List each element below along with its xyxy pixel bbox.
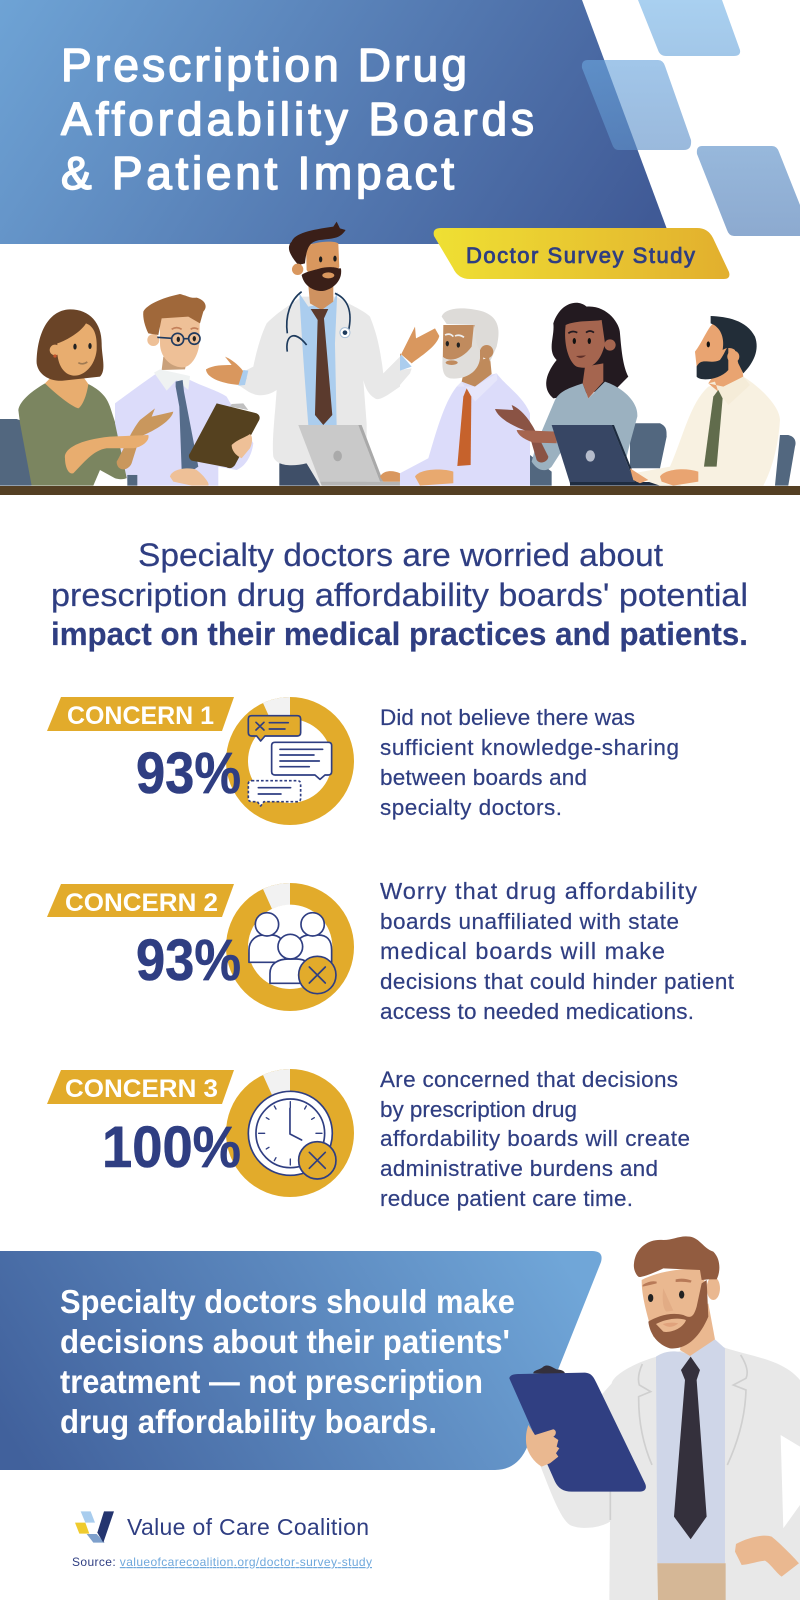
- description: reduce patient care time.: [380, 1186, 633, 1211]
- callout text: treatment — not prescription: [60, 1363, 483, 1400]
- doctor's raised hand: [400, 327, 439, 385]
- description: Worry that drug affordability: [380, 878, 697, 904]
- title: Prescription Drug: [61, 39, 467, 91]
- donut chart 93% with chat icons: [237, 697, 343, 814]
- description: administrative burdens and: [380, 1156, 658, 1181]
- title: & Patient Impact: [61, 147, 454, 199]
- description: access to needed medications.: [380, 999, 694, 1024]
- title: [61, 39, 534, 199]
- stat 93%: 93%: [136, 928, 241, 993]
- description: Are concerned that decisions: [380, 1067, 678, 1092]
- concern 2: [47, 878, 735, 1024]
- donut chart 93% with people icon: [237, 883, 343, 1000]
- woman in green: [18, 309, 132, 486]
- description: [380, 705, 679, 820]
- concern 1: [47, 697, 679, 820]
- left half of the team: [0, 222, 400, 486]
- chairs: [530, 423, 796, 486]
- badge: Doctor Survey Study: Doctor Survey Study: [466, 243, 695, 268]
- intro text: prescription drug affordability boards' potential: [51, 577, 748, 613]
- man with beard: [630, 316, 780, 486]
- description: affordability boards will create: [380, 1126, 690, 1151]
- callout text: drug affordability boards.: [60, 1403, 437, 1440]
- older man: [400, 308, 530, 486]
- woman with dark hair: [495, 303, 637, 470]
- chair: [0, 419, 32, 486]
- description: between boards and: [380, 765, 587, 790]
- callout text: [60, 1283, 515, 1440]
- description: medical boards will make: [380, 938, 665, 964]
- logo mark: [75, 1511, 114, 1543]
- dark laptop: [552, 425, 681, 486]
- illustration: doctor with clipboard: [509, 1236, 800, 1600]
- logo: Value of Care Coalition: [75, 1511, 369, 1543]
- header banner: [0, 0, 668, 244]
- right half of the team: [400, 303, 796, 486]
- callout panel: [0, 1251, 602, 1470]
- callout text: decisions about their patients': [60, 1323, 510, 1360]
- woman's clapping hands: [65, 408, 173, 474]
- tag: concern 1: [47, 697, 234, 731]
- callout text: Specialty doctors should make: [60, 1283, 515, 1320]
- tag: concern 3: CONCERN 3: [65, 1075, 218, 1103]
- title: Affordability Boards: [61, 93, 534, 145]
- tag: concern 1: CONCERN 1: [67, 702, 214, 730]
- stat 100%: 100%: [102, 1115, 241, 1180]
- stat 93%: 93%: [136, 741, 241, 806]
- tag: concern 2: CONCERN 2: [65, 889, 218, 917]
- description: specialty doctors.: [380, 795, 562, 820]
- central doctor: [206, 222, 400, 486]
- intro text: impact on their medical practices and patients.: [51, 616, 748, 652]
- description: decisions that could hinder patient: [380, 969, 735, 994]
- description: [380, 878, 735, 1024]
- badge: Doctor Survey Study: [434, 228, 729, 279]
- description: by prescription drug: [380, 1097, 577, 1122]
- intro text: [51, 537, 748, 652]
- description: sufficient knowledge-sharing: [380, 735, 679, 760]
- table: [0, 486, 800, 495]
- description: [380, 1067, 690, 1211]
- description: boards unaffiliated with state: [380, 909, 679, 934]
- tag: concern 2: [47, 884, 234, 917]
- illustration: doctors around a table: [0, 222, 800, 495]
- tag: concern 3: [47, 1070, 234, 1104]
- intro text: Specialty doctors are worried about: [138, 537, 663, 573]
- decorative parallelograms: [582, 0, 800, 236]
- concern 3: [47, 1067, 690, 1211]
- logo: Value of Care Coalition: Value of Care Coalition: [127, 1514, 369, 1540]
- description: Did not believe there was: [380, 705, 635, 730]
- donut chart 100% with clock icon: [237, 1069, 343, 1186]
- man with glasses: [115, 294, 260, 486]
- source line: Source: valueofcarecoalition.org/doctor-survey-study: [72, 1555, 372, 1569]
